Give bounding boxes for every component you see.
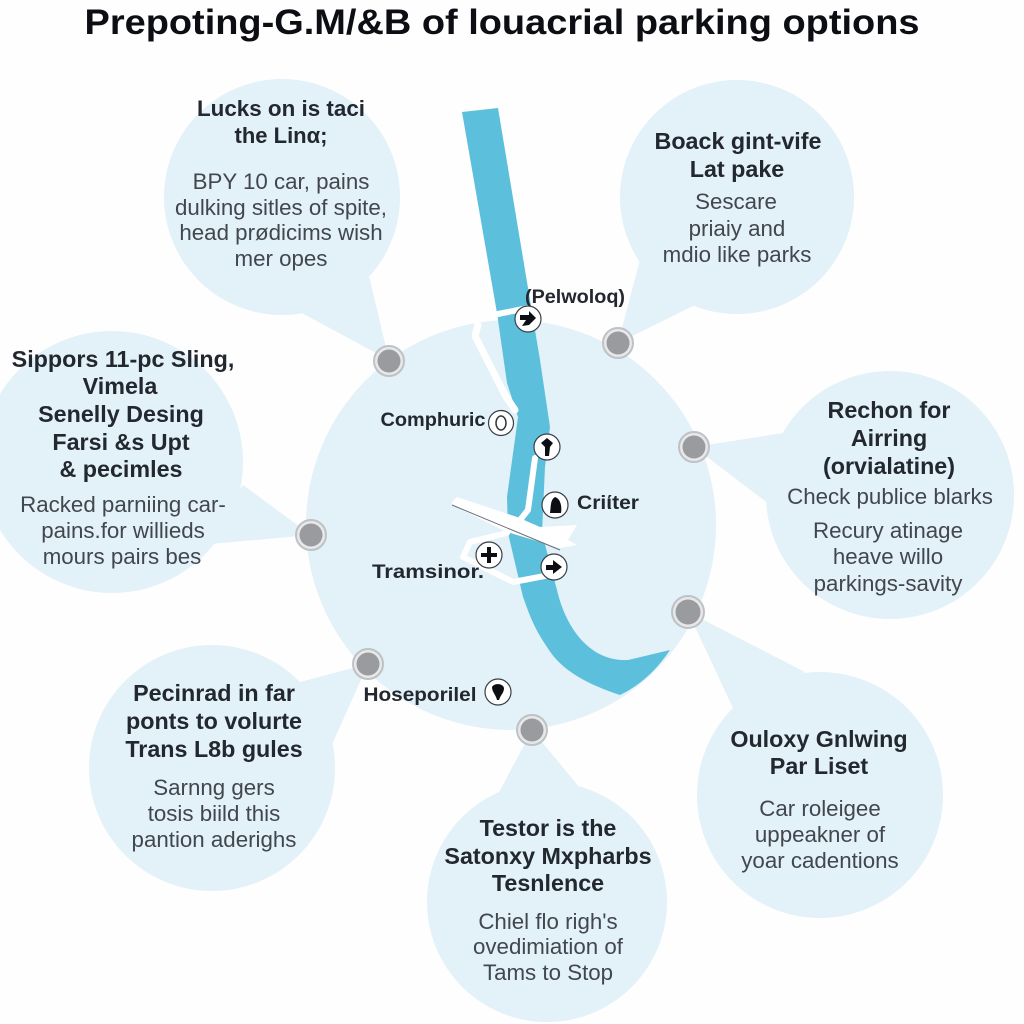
callout bubble 1: the Linα; (235, 123, 327, 148)
callout bubble 6: uppeakner of (755, 822, 886, 847)
connector dots (296, 328, 709, 745)
callout bubble 5: pantion aderighs (132, 827, 296, 852)
callout bubble 7: Tams to Stop (483, 960, 613, 985)
river (462, 108, 670, 695)
callout bubble 5 (89, 645, 368, 891)
callout bubble 3: pains.for willieds (41, 518, 205, 543)
callout bubble 6: Car roleigee (759, 796, 881, 821)
callout bubble 2: Sescare (695, 189, 777, 214)
callout bubble 3: Racked parniing car- (20, 492, 226, 517)
callout bubble 3: Senelly Desing (38, 401, 204, 427)
callout bubble 7: Satonxy Mxpharbs (444, 843, 652, 869)
title: Prepoting-G.M/&B of louacrial parking options (84, 3, 920, 42)
map labels: Hoseporilel (364, 684, 476, 706)
callout bubble 1: dulking sitles of spite, (175, 195, 387, 220)
callout bubble 1 (164, 79, 400, 360)
callout bubble 6: Ouloxy Gnlwing (730, 726, 908, 752)
callout bubble 6 (688, 612, 943, 918)
callout bubble 3 (0, 331, 311, 593)
callout bubble 7: Chiel flo righ's (478, 909, 618, 934)
callout bubble 2: Lat pake (690, 156, 784, 182)
callout bubble 1: BPY 10 car, pains (193, 169, 369, 194)
callout bubble 3: & pecimles (59, 456, 183, 482)
callout bubble 7: ovedimiation of (473, 934, 624, 959)
callout bubble 6: yoar cadentions (741, 848, 899, 873)
map labels: (Pelwoloq) (525, 286, 625, 308)
callout bubble 1: head prødicims wish (179, 220, 383, 245)
callout bubble 3: mours pairs bes (43, 544, 201, 569)
callout bubble 4: (orvialatine) (823, 453, 955, 479)
central map circle (306, 108, 716, 730)
callout bubble 4: heave willo (833, 544, 943, 569)
airplane-shaped road crossing (452, 497, 577, 548)
callout bubble 5: ponts to volurte (126, 708, 302, 734)
map labels: Comphuric (380, 409, 486, 431)
map labels (364, 286, 639, 706)
map markers (476, 306, 568, 705)
callout bubble 5: Trans L8b gules (125, 736, 303, 762)
map labels: Criίter (577, 492, 639, 514)
callout bubble 2 (618, 80, 854, 343)
callout bubble 1: Lucks on is taci (197, 96, 365, 121)
callout bubble 2: mdio like parks (663, 242, 811, 267)
callout bubble 2: priaiy and (689, 216, 785, 241)
callout bubble 4: Rechon for (828, 397, 950, 423)
callout bubble 4 (694, 371, 1014, 619)
white roads (463, 308, 550, 582)
callout bubble 3: Sippors 11-pc Sling, (12, 346, 234, 372)
callout bubble 5: Sarnng gers (153, 775, 275, 800)
callout bubble 4: parkings-savity (814, 571, 963, 596)
callout bubble 3: Vimela (83, 373, 158, 399)
callout bubble 7: Testor is the (480, 815, 616, 841)
callout bubble 5: tosis biild this (148, 801, 280, 826)
callout bubble 3: Farsi &s Upt (52, 429, 190, 455)
callout bubble 4: Check publice blarks (787, 484, 993, 509)
callout bubble 4: Airring (851, 425, 927, 451)
map labels: Tramsinor. (372, 561, 484, 583)
callout bubble 7: Tesnlence (492, 870, 604, 896)
callout bubble 6: Par Liset (770, 753, 868, 779)
callout bubble 4: Recury atinage (813, 518, 963, 543)
callout bubble 2: Boack gint-vife (654, 128, 822, 154)
callout bubble 7 (427, 730, 667, 1022)
callout bubble 1: mer opes (235, 246, 327, 271)
callout bubble 5: Pecinrad in far (133, 680, 295, 706)
